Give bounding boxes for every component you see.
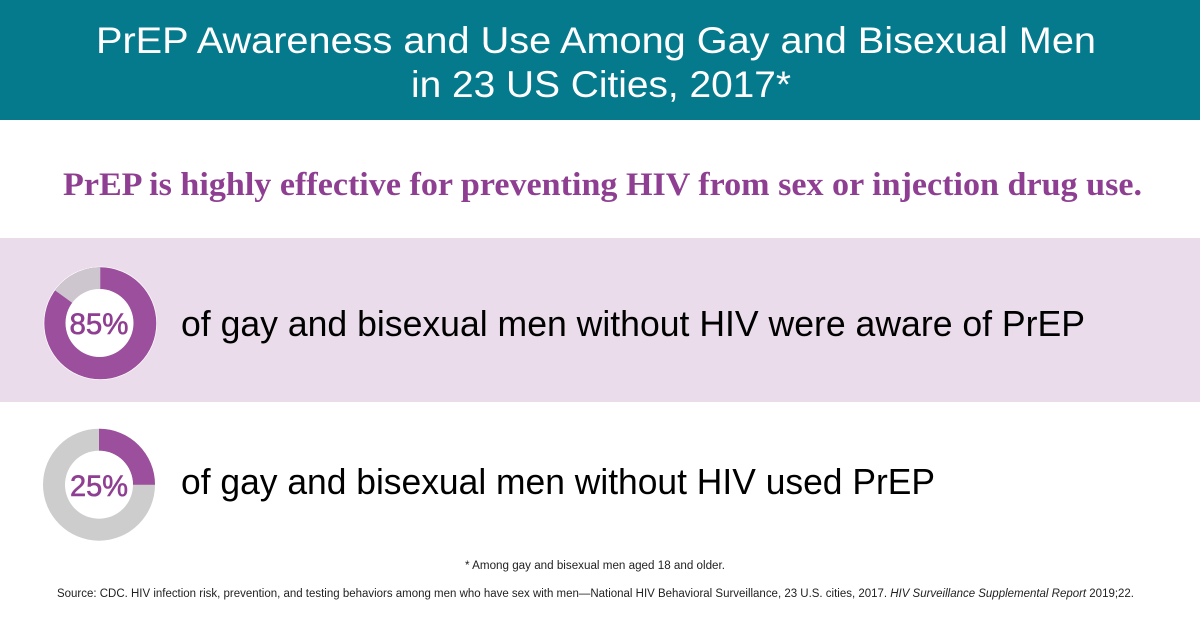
donut chart: 25% — [43, 429, 155, 541]
panel: use — [43, 429, 935, 541]
title banner: in 23 US Cities, 2017* — [411, 64, 791, 105]
source citation: Source: CDC. HIV infection risk, prevention, and testing behaviors among men who have sex with men—National HIV Behavioral Surveillance, 23 U.S. cities, 2017. HIV Surveillance Supplemental Report 2019;22. — [57, 588, 1134, 600]
title banner: PrEP Awareness and Use Among Gay and Bisexual Men — [96, 20, 1096, 61]
statement: aware of PrEP: of gay and bisexual men without HIV were aware of PrEP — [181, 303, 1085, 344]
title banner — [0, 0, 1200, 120]
donut chart: 85%: 85% — [70, 308, 128, 341]
donut chart: 85% — [44, 267, 157, 380]
footnote: * Among gay and bisexual men aged 18 and older. — [465, 560, 725, 572]
subheading: PrEP is highly effective for preventing HIV from sex or injection drug use. — [63, 167, 1142, 203]
panel: awareness — [0, 238, 1200, 402]
statement: used PrEP: of gay and bisexual men without HIV used PrEP — [181, 461, 935, 502]
donut chart: 25%: 25% — [70, 470, 128, 503]
